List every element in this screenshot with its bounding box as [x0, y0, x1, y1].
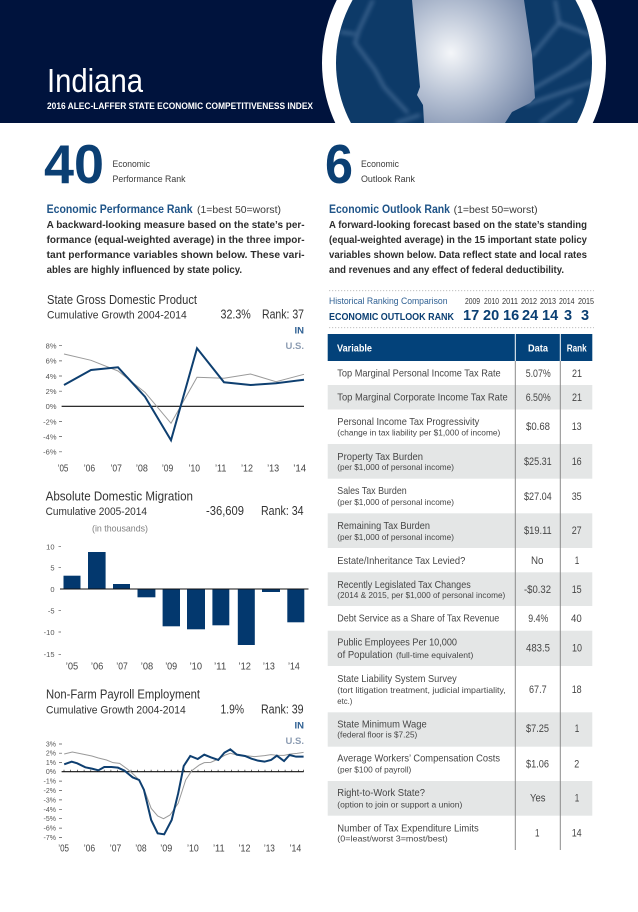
payroll heading: 1.9%: [220, 702, 244, 716]
row: right to work: Right-to-Work State?: [337, 787, 425, 799]
line chart: payroll growth: ’05: [58, 843, 69, 855]
row: minimum wage: (federal floor is $7.25): [337, 729, 417, 739]
row: remaining tax: $19.11: [524, 525, 552, 537]
table header: Variable: [337, 342, 372, 354]
row: property tax: (per $1,000 of personal income): [337, 462, 454, 472]
panel: economic performance rank: [44, 133, 305, 276]
line chart: GDP growth: 4%: [46, 372, 57, 381]
line chart: GDP growth: ’10: [189, 463, 200, 475]
row: liability survey: 18: [572, 684, 582, 696]
row: right to work: 1: [575, 793, 579, 805]
line chart: payroll growth: ’12: [238, 843, 251, 855]
row: property tax: [337, 451, 582, 472]
outlook description: and revenues and any effect of federal deductibility.: [329, 264, 564, 276]
table: policy variables: [328, 334, 592, 850]
line chart: GDP growth: -4%: [43, 432, 57, 441]
row: tax expenditure limits: Number of Tax Expenditure Limits: [337, 822, 479, 834]
row: workers compensation: (per $100 of payroll): [337, 765, 411, 775]
payroll heading: Non-Farm Payroll Employment: [46, 686, 200, 701]
row: debt service: 40: [571, 613, 582, 625]
payroll heading: [46, 686, 304, 716]
years row: 2015: [578, 297, 594, 306]
row: recent tax changes: Recently Legislated Tax Changes: [337, 579, 471, 591]
bar chart: migration: -5: [48, 606, 54, 616]
line chart: GDP growth: 2%: [46, 387, 57, 396]
payroll heading: Rank: 39: [261, 702, 304, 716]
header banner: [0, 0, 638, 123]
line chart: payroll growth: ’09: [160, 843, 172, 855]
row: personal income tax rate: Top Marginal Personal Income Tax Rate: [337, 368, 501, 380]
outlook caption: Economic: [361, 159, 399, 170]
line chart: payroll growth: -1%: [44, 779, 56, 786]
outlook description: A forward-looking forecast based on the state’s standing: [329, 219, 587, 231]
panel: economic outlook rank: [325, 133, 587, 276]
row: tax expenditure limits: (0=least/worst 3=most/best): [337, 833, 448, 843]
line chart: payroll growth: ’06: [84, 843, 95, 855]
row: recent tax changes: -$0.32: [524, 584, 551, 596]
chart heading: State Gross Domestic Product: [47, 292, 197, 307]
chart heading: 32.3%: [220, 307, 251, 321]
line chart: GDP growth: -2%: [43, 417, 57, 426]
row: public employees: 483.5: [526, 642, 550, 654]
big number 40: 40: [44, 133, 104, 195]
row: personal income tax rate: 21: [572, 368, 582, 380]
row: public employees: Public Employees Per 10,000: [337, 637, 457, 649]
line chart: payroll growth: [44, 742, 304, 855]
payroll legend: U.S.: [286, 736, 304, 747]
description text: tant performance variables shown below. These vari-: [47, 249, 305, 261]
row: corporate income tax rate: 21: [572, 392, 582, 404]
historical rank numbers: [463, 308, 589, 324]
row: sales tax: Sales Tax Burden: [337, 485, 407, 497]
subtitle: 2016 ALEC-LAFFER STATE ECONOMIC COMPETITIVENESS INDEX: [47, 101, 314, 112]
line chart: payroll growth: 1%: [46, 760, 56, 767]
row: minimum wage: $7.25: [526, 723, 549, 735]
migration heading: Rank: 34: [261, 504, 304, 518]
description text: A backward-looking measure based on the state’s per-: [47, 219, 305, 231]
row: debt service: 9.4%: [528, 613, 548, 625]
bar chart: migration: [44, 542, 308, 672]
historical rank numbers: 3: [564, 308, 572, 324]
row: minimum wage: State Minimum Wage: [337, 719, 427, 731]
icon: Indiana state map in circle: [322, 0, 606, 123]
bar chart: migration: -15: [44, 650, 54, 659]
line chart: payroll growth: ’11: [213, 843, 225, 855]
historical rank numbers: 24: [522, 308, 538, 324]
payroll legend: IN: [294, 721, 304, 732]
row: estate tax: 1: [575, 555, 579, 567]
row: tax expenditure limits: 14: [572, 828, 582, 840]
line chart: payroll growth: 2%: [46, 751, 56, 758]
line chart: payroll growth: -2%: [44, 788, 56, 795]
historical rank numbers: 14: [542, 308, 558, 324]
line chart: payroll growth: ’13: [264, 843, 275, 855]
line chart: payroll growth: -6%: [44, 826, 56, 833]
table header: Data: [528, 342, 548, 354]
line chart: GDP growth: [43, 342, 306, 475]
bar chart: migration: ’06: [91, 660, 103, 672]
years row: 2013: [540, 297, 556, 306]
row: property tax: Property Tax Burden: [337, 451, 423, 463]
outlook heading: [329, 202, 538, 216]
table header: [328, 334, 592, 361]
row: sales tax: (per $1,000 of personal income): [337, 497, 454, 507]
historical label: Historical Ranking Comparison: [329, 296, 448, 307]
historical rank numbers: 16: [503, 308, 519, 324]
line chart: GDP growth: ’07: [110, 463, 122, 475]
outlook caption: [361, 159, 415, 185]
migration heading: [46, 489, 304, 535]
row: recent tax changes: (2014 & 2015, per $1,000 of personal income): [337, 590, 505, 600]
row: remaining tax: 27: [572, 525, 582, 537]
row: minimum wage: 1: [575, 723, 579, 735]
years row: 2014: [559, 297, 575, 306]
description text: formance (equal-weighted average) in the three impor-: [47, 234, 305, 246]
chart heading: Cumulative Growth 2004-2014: [47, 309, 187, 321]
line chart: payroll growth: -3%: [44, 797, 56, 804]
row: recent tax changes: 15: [572, 584, 582, 596]
row: right to work: (option to join or support a union): [337, 799, 462, 809]
row: minimum wage: [337, 719, 579, 739]
rank caption: Economic: [112, 159, 150, 170]
migration heading: -36,609: [206, 504, 244, 518]
bar chart: migration: ’12: [238, 660, 251, 672]
row: workers compensation: $1.06: [526, 759, 549, 771]
line chart: GDP growth: 6%: [46, 357, 57, 366]
line chart: payroll growth: ’14: [290, 843, 301, 855]
row: liability survey: etc.): [337, 696, 352, 706]
bar chart: migration: 10: [46, 542, 54, 552]
line chart: GDP growth: -6%: [43, 448, 57, 457]
migration heading: Cumulative 2005-2014: [46, 506, 147, 518]
line chart: GDP growth: ’06: [84, 463, 95, 475]
years row: 2009: [465, 297, 480, 306]
outlook description: [329, 219, 587, 276]
line chart: payroll growth: 0%: [46, 769, 56, 776]
years row: 2011: [502, 297, 519, 306]
bar chart: migration: ’10: [190, 660, 202, 672]
big number 6: 6: [325, 133, 353, 195]
row: corporate income tax rate: 6.50%: [526, 392, 551, 404]
title: Indiana: [47, 62, 144, 99]
row: liability survey: State Liability System Survey: [337, 673, 457, 685]
row: public employees: of Population: [337, 649, 393, 661]
bar chart: migration: ’08: [141, 660, 153, 672]
row: public employees: [337, 637, 582, 661]
outlook rank label: ECONOMIC OUTLOOK RANK: [329, 311, 454, 323]
row: estate tax: No: [531, 555, 544, 567]
payroll legend: [286, 721, 304, 747]
row: sales tax: [337, 485, 582, 507]
rank caption: Performance Rank: [112, 174, 186, 185]
bar chart: migration: -10: [44, 628, 54, 637]
years row: 2010: [484, 297, 499, 306]
row: progressivity: Personal Income Tax Progressivity: [337, 416, 480, 428]
row: personal income tax rate: 5.07%: [526, 368, 551, 380]
row: debt service: Debt Service as a Share of Tax Revenue: [337, 613, 499, 625]
line chart: GDP growth: 0%: [46, 402, 57, 411]
historical rank numbers: 17: [463, 308, 479, 324]
migration heading: (in thousands): [92, 524, 148, 535]
migration heading: Absolute Domestic Migration: [46, 489, 193, 504]
row: public employees: (full-time equivalent): [396, 650, 473, 660]
row: sales tax: 35: [572, 491, 582, 503]
row: right to work: Yes: [530, 793, 546, 805]
line chart: payroll growth: -4%: [44, 807, 56, 814]
line chart: GDP growth: ’12: [241, 463, 253, 475]
row: liability survey: [337, 673, 582, 706]
row: sales tax: $27.04: [524, 491, 552, 503]
row: workers compensation: Average Workers’ Compensation Costs: [337, 753, 500, 765]
line chart: GDP growth: ’11: [215, 463, 227, 475]
line chart: GDP growth: ’13: [267, 463, 279, 475]
heading: (1=best 50=worst): [197, 204, 281, 216]
bar chart: migration: ’05: [66, 660, 78, 672]
row: progressivity: $0.68: [526, 421, 550, 433]
row: liability survey: (tort litigation treatment, judicial impartiality,: [337, 685, 506, 695]
historical rank numbers: 3: [581, 308, 589, 324]
row: estate tax: [337, 555, 579, 567]
table header: Rank: [567, 342, 587, 354]
row: progressivity: 13: [572, 421, 582, 433]
chart heading: [47, 292, 304, 321]
outlook description: (equal-weighted average) in the 15 important state policy: [329, 234, 587, 246]
legend: [286, 326, 304, 352]
bar chart: migration: ’14: [288, 660, 300, 672]
panel: historical ranking comparison: [329, 291, 594, 328]
row: estate tax: Estate/Inheritance Tax Levied?: [337, 555, 465, 567]
panel: absolute domestic migration: [44, 489, 308, 672]
row: tax expenditure limits: [337, 822, 582, 843]
legend: U.S.: [286, 341, 304, 352]
description text: ables are highly influenced by state policy.: [47, 264, 242, 276]
bar chart: migration: ’13: [263, 660, 275, 672]
line chart: payroll growth: ’08: [135, 843, 147, 855]
years row: 2012: [521, 297, 537, 306]
row: remaining tax: [337, 520, 582, 542]
outlook heading: Economic Outlook Rank: [329, 202, 450, 216]
row: tax expenditure limits: 1: [535, 828, 540, 840]
bar chart: migration: ’11: [214, 660, 227, 672]
line chart: GDP growth: ’05: [58, 463, 69, 475]
line chart: payroll growth: -7%: [44, 835, 56, 842]
bar chart: migration: 0: [50, 585, 54, 594]
row: liability survey: 67.7: [529, 684, 547, 696]
row: corporate income tax rate: Top Marginal Corporate Income Tax Rate: [337, 392, 508, 404]
line chart: payroll growth: -5%: [44, 816, 56, 823]
row: remaining tax: Remaining Tax Burden: [337, 520, 430, 532]
row: workers compensation: [337, 753, 579, 775]
heading: Economic Performance Rank: [47, 202, 193, 216]
line chart: GDP growth: ’09: [162, 463, 173, 475]
line chart: payroll growth: ’07: [110, 843, 121, 855]
line chart: GDP growth: ’14: [293, 463, 306, 475]
row: remaining tax: (per $1,000 of personal income): [337, 532, 454, 542]
line chart: payroll growth: 3%: [46, 742, 56, 748]
panel: non-farm payroll employment: [44, 686, 304, 855]
row: property tax: 16: [572, 456, 582, 468]
row: right to work: [337, 787, 579, 809]
row: workers compensation: 2: [574, 759, 579, 771]
row: recent tax changes: [337, 579, 582, 600]
line chart: GDP growth: 8%: [46, 342, 57, 350]
chart heading: Rank: 37: [262, 307, 304, 321]
outlook description: variables shown below. Data reflect state and local rates: [329, 249, 587, 261]
bar chart: migration: 5: [50, 564, 54, 572]
line chart: payroll growth: ’10: [187, 843, 199, 855]
row: public employees: 10: [572, 642, 582, 654]
historical rank numbers: 20: [483, 308, 499, 324]
rank caption: [112, 159, 186, 185]
legend: IN: [294, 326, 304, 337]
outlook heading: (1=best 50=worst): [454, 204, 538, 216]
row: progressivity: (change in tax liability per $1,000 of income): [337, 428, 500, 438]
outlook caption: Outlook Rank: [361, 174, 415, 185]
panel: state gross domestic product: [43, 292, 306, 475]
row: progressivity: [337, 416, 582, 438]
row: property tax: $25.31: [524, 456, 552, 468]
years row: [465, 297, 594, 306]
line chart: GDP growth: ’08: [136, 463, 148, 475]
bar chart: migration: ’09: [165, 660, 177, 672]
bar chart: migration: ’07: [116, 660, 128, 672]
description text: [47, 219, 305, 276]
payroll heading: Cumulative Growth 2004-2014: [46, 704, 186, 716]
